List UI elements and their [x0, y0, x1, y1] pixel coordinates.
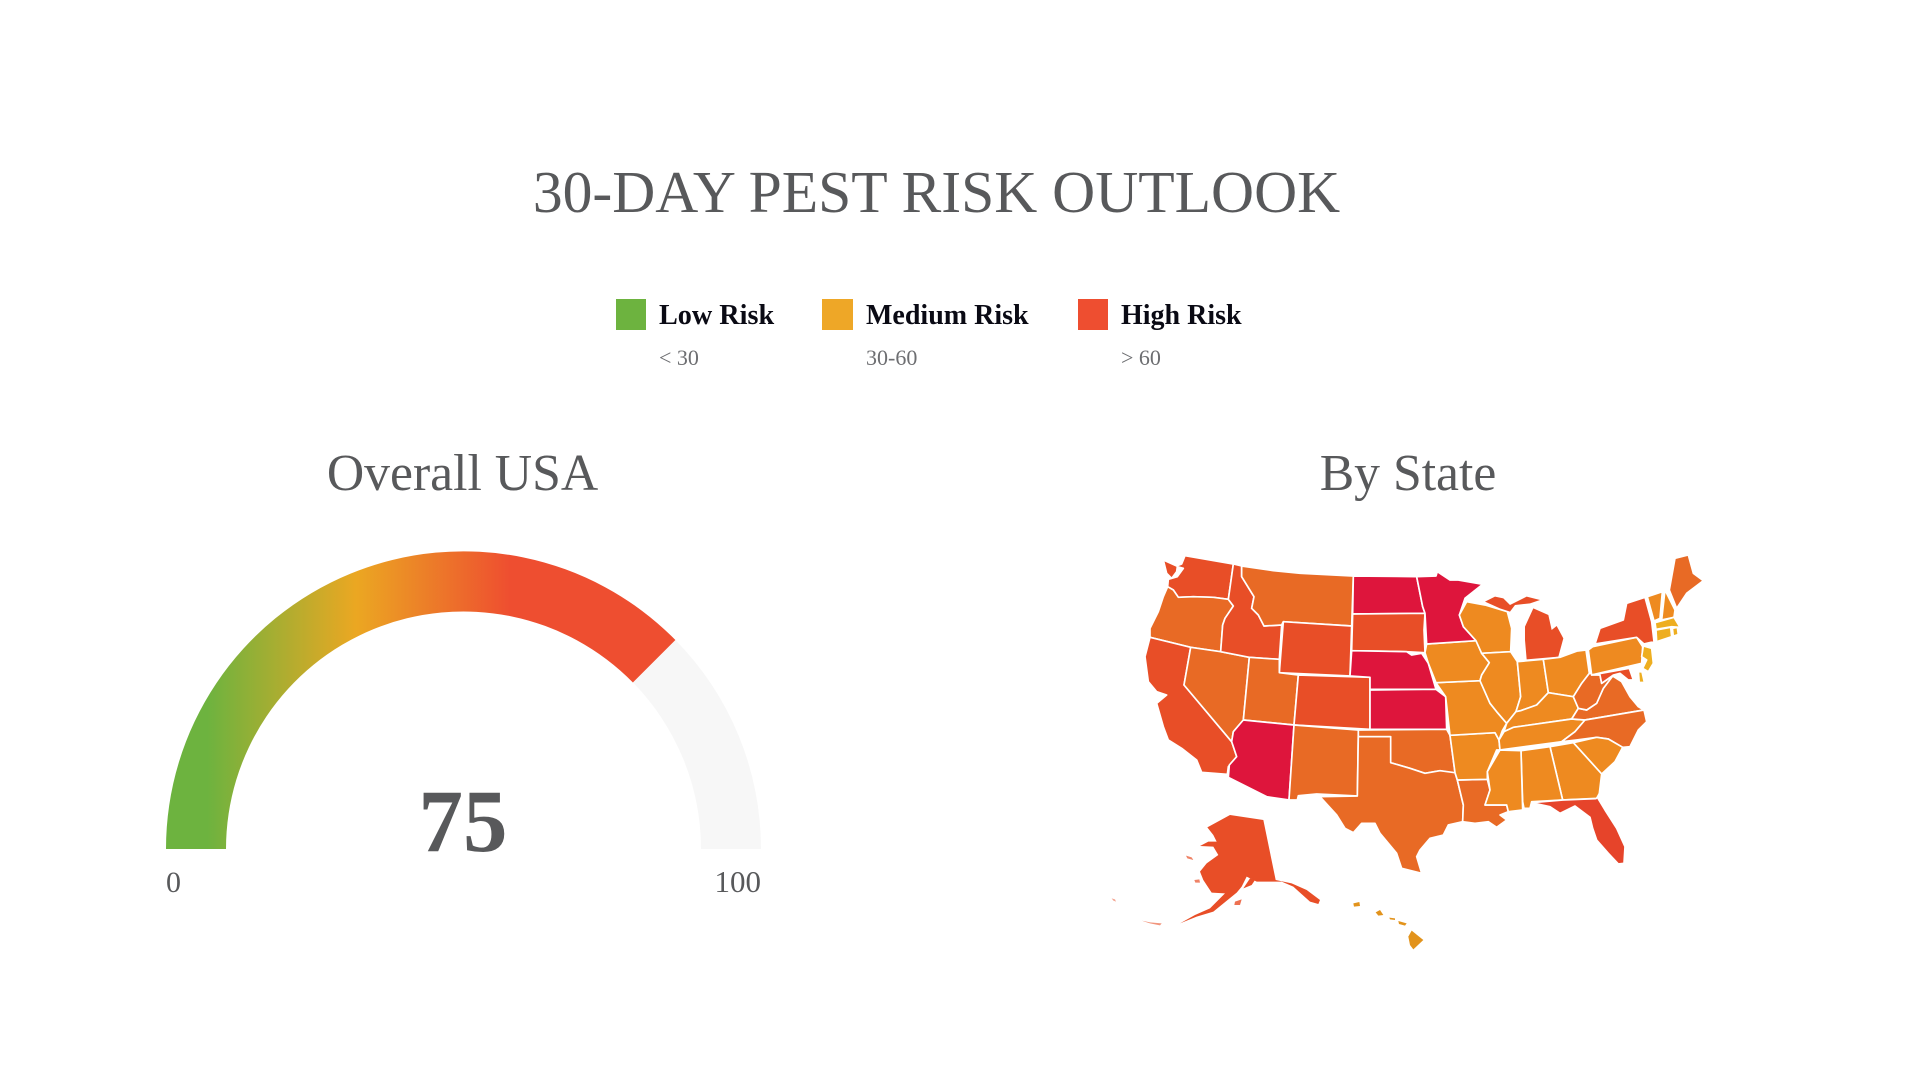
state: New York [1595, 597, 1654, 644]
legend: low risk: Low Risk [659, 300, 774, 331]
state: Hawaii [1353, 902, 1423, 949]
state: Louisiana [1457, 779, 1508, 827]
state: North Dakota [1353, 576, 1425, 614]
state: West Virginia [1573, 673, 1613, 710]
state: Colorado [1294, 675, 1370, 729]
state: Georgia [1550, 743, 1602, 800]
state: Michigan lower peninsula [1525, 608, 1563, 659]
title: 30-DAY PEST RISK OUTLOOK [533, 159, 1340, 225]
state: Indiana [1516, 659, 1548, 712]
legend: medium risk [822, 299, 1029, 370]
state: Arizona [1228, 720, 1294, 800]
state: Wisconsin [1459, 602, 1512, 653]
gauge chart [166, 551, 761, 899]
state: Connecticut [1656, 627, 1672, 642]
state: Michigan upper peninsula [1485, 597, 1540, 612]
state: Ohio [1543, 650, 1589, 697]
state: Wyoming [1279, 622, 1352, 676]
state: Massachusetts [1655, 617, 1680, 629]
state: Utah [1243, 657, 1298, 725]
state: Nebraska [1350, 651, 1436, 689]
state: Kansas [1370, 689, 1447, 729]
state: Delaware [1639, 673, 1643, 682]
state: Oklahoma [1358, 729, 1455, 773]
gauge value: 75 [418, 773, 508, 871]
state: Missouri [1436, 681, 1507, 740]
state: Maine [1669, 555, 1703, 608]
state: Washington [1163, 556, 1233, 599]
state: Virginia [1572, 676, 1644, 720]
state: Montana [1242, 566, 1353, 626]
state: Florida [1532, 797, 1625, 864]
gauge maximum: 100 [714, 864, 761, 899]
state: New Mexico [1289, 725, 1358, 800]
gauge value arc [166, 551, 675, 849]
state: Mississippi [1485, 750, 1523, 812]
state: Alabama [1521, 747, 1563, 808]
gauge track [633, 640, 761, 849]
state: South Dakota [1352, 613, 1425, 653]
state: Nevada [1184, 647, 1249, 742]
state: Idaho [1221, 564, 1282, 659]
state: Texas [1320, 737, 1463, 873]
state: New Hampshire [1662, 590, 1675, 620]
state: Iowa [1425, 641, 1489, 683]
state: Vermont [1647, 592, 1662, 621]
heading: overall USA: Overall USA [327, 445, 598, 502]
legend: high risk [1078, 299, 1242, 370]
state: California [1145, 637, 1237, 774]
legend [616, 299, 1242, 370]
state: Kentucky [1504, 693, 1578, 732]
heading: by state: By State [1320, 445, 1496, 502]
state: New Jersey [1642, 646, 1653, 672]
state: Tennessee [1499, 719, 1585, 750]
legend: low risk: < 30 [659, 345, 699, 370]
legend: low risk [616, 299, 774, 370]
state: Illinois [1480, 652, 1521, 723]
state: Arkansas [1450, 733, 1500, 780]
state: South Carolina [1573, 737, 1623, 774]
legend: medium risk: 30-60 [866, 345, 917, 370]
state: Alaska [1112, 815, 1320, 925]
legend: high risk: High Risk [1121, 300, 1242, 331]
state: North Carolina [1562, 710, 1647, 747]
state: Oregon [1150, 587, 1233, 652]
legend: medium risk: Medium Risk [866, 300, 1029, 331]
state: Pennsylvania [1588, 637, 1643, 675]
state: Rhode Island [1673, 628, 1677, 635]
state: Maryland [1592, 668, 1633, 683]
map: US states [1112, 555, 1703, 949]
legend: high risk: > 60 [1121, 345, 1161, 370]
gauge minimum: 0 [166, 866, 181, 899]
state: Minnesota [1417, 572, 1483, 644]
